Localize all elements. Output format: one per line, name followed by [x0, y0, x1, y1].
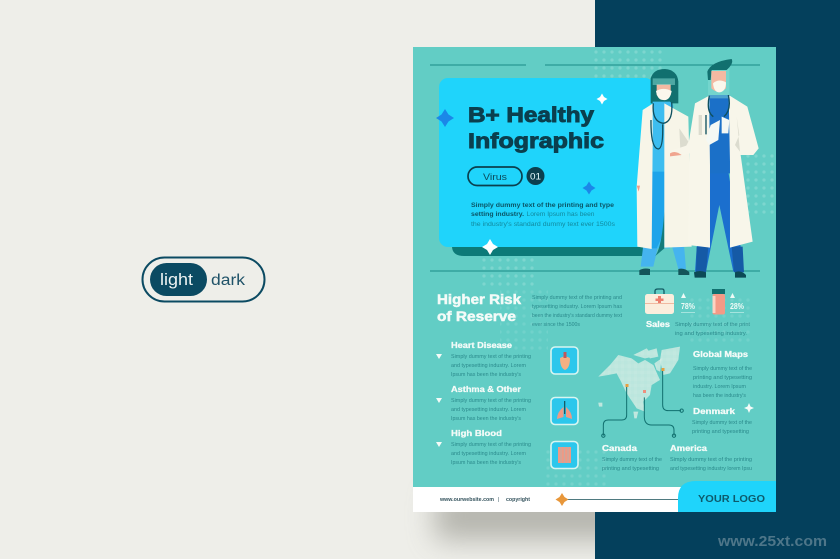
denmark — [692, 403, 754, 435]
dark background panel — [595, 0, 840, 559]
item: asthma: Asthma & Other — [451, 384, 522, 394]
intro paragraph: typesetting industry. Lorem Ipsum has — [532, 304, 622, 310]
footer: | — [498, 497, 499, 503]
hero description: the industry's standard dummy text ever 1500s — [471, 221, 616, 228]
canada: Canada — [602, 443, 637, 453]
toggle: light dark: dark — [211, 272, 245, 289]
sales — [646, 319, 750, 337]
doctor: woman — [637, 69, 692, 275]
intro paragraph: been the industry's standard dummy text — [532, 313, 622, 319]
sales: ing and typesetting industry. — [675, 331, 747, 337]
doctors illustration — [637, 59, 759, 278]
title — [468, 104, 604, 153]
heading: higher risk — [437, 292, 522, 324]
item: high blood: and typesetting industry. Lorem — [451, 451, 526, 457]
watermark: www.25xt.com — [717, 533, 827, 550]
hero panel — [439, 78, 654, 256]
poster — [413, 47, 776, 512]
item: asthma: Simply dummy text of the printing — [451, 398, 531, 404]
map: north america — [598, 347, 683, 437]
denmark: printing and typesetting — [692, 429, 749, 435]
sparkles — [436, 94, 608, 255]
intro paragraph — [532, 295, 622, 328]
diamond marker — [556, 493, 568, 506]
stat: 78% — [681, 293, 695, 313]
poster shadow — [435, 492, 635, 540]
title: B+ Healthy — [468, 104, 594, 127]
america: America — [670, 443, 707, 453]
sales: Sales — [646, 319, 670, 329]
doctor: man — [670, 59, 759, 278]
hero description: Lorem Ipsum has been — [526, 211, 595, 218]
global maps: industry. Lorem Ipsum — [693, 384, 746, 390]
top rules — [430, 65, 760, 271]
global maps: Global Maps — [693, 349, 748, 359]
global maps — [693, 349, 752, 399]
toggle: light dark — [142, 258, 264, 302]
footer: www.ourwebsite.com — [439, 497, 494, 503]
icon: heart — [551, 347, 578, 374]
icon: lungs — [551, 398, 578, 424]
item: high blood — [436, 428, 531, 466]
stat: 78%: 78% — [681, 302, 695, 311]
footer — [413, 481, 776, 512]
heading: higher risk: of Reserve — [437, 309, 517, 324]
toggle: light dark: light — [160, 270, 193, 289]
footer: copyright — [506, 497, 530, 503]
item: heart disease: Ipsum has been the industry's — [451, 372, 521, 378]
heading: higher risk: Higher Risk — [437, 292, 522, 307]
item: heart disease: Heart Disease — [451, 340, 512, 350]
intro paragraph: ever since the 1500s — [532, 322, 580, 328]
tag: virus: 01 — [530, 172, 541, 182]
hero description — [471, 202, 616, 228]
hero description: Simply dummy text of the printing and type — [471, 202, 614, 209]
sales: Simply dummy text of the print — [675, 322, 750, 328]
icon: first aid kit — [645, 289, 674, 314]
title: Infographic — [468, 130, 604, 153]
item: heart disease: Simply dummy text of the printing — [451, 354, 531, 360]
tag: virus — [468, 167, 544, 186]
canada: Simply dummy text of the — [602, 457, 662, 463]
stat: 28% — [730, 293, 744, 313]
america — [670, 443, 752, 472]
global maps: printing and typesetting — [693, 375, 752, 381]
america: Simply dummy text of the printing — [670, 457, 752, 463]
global maps: Simply dummy text of the — [693, 366, 752, 372]
canada — [602, 443, 662, 472]
item: high blood: Simply dummy text of the printing — [451, 442, 531, 448]
item: heart disease: and typesetting industry. Lorem — [451, 363, 526, 369]
global maps: has been the industry's — [693, 393, 746, 399]
icon: blood vessels — [551, 442, 578, 468]
item: high blood: High Blood — [451, 428, 502, 438]
item: high blood: Ipsum has been the industry's — [451, 460, 521, 466]
denmark: Simply dummy text of the — [692, 420, 752, 426]
canada: printing and typesetting — [602, 466, 659, 472]
decorative dots — [478, 50, 775, 486]
logo block — [678, 481, 776, 512]
denmark: Denmark — [693, 406, 735, 416]
item: asthma — [436, 384, 531, 422]
icon: pill bottle — [712, 289, 725, 314]
stat: 28%: 28% — [730, 302, 744, 311]
america: and typesetting industry lorem Ipsu — [670, 466, 752, 472]
item: heart disease — [436, 340, 531, 378]
tag: virus: Virus — [483, 172, 507, 183]
hero description: setting industry. — [471, 211, 524, 218]
map connector lines — [602, 370, 683, 437]
intro paragraph: Simply dummy text of the printing and — [532, 295, 622, 301]
item: asthma: and typesetting industry. Lorem — [451, 407, 526, 413]
item: asthma: Ipsum has been the industry's — [451, 416, 521, 422]
logo block: YOUR LOGO — [698, 494, 765, 505]
